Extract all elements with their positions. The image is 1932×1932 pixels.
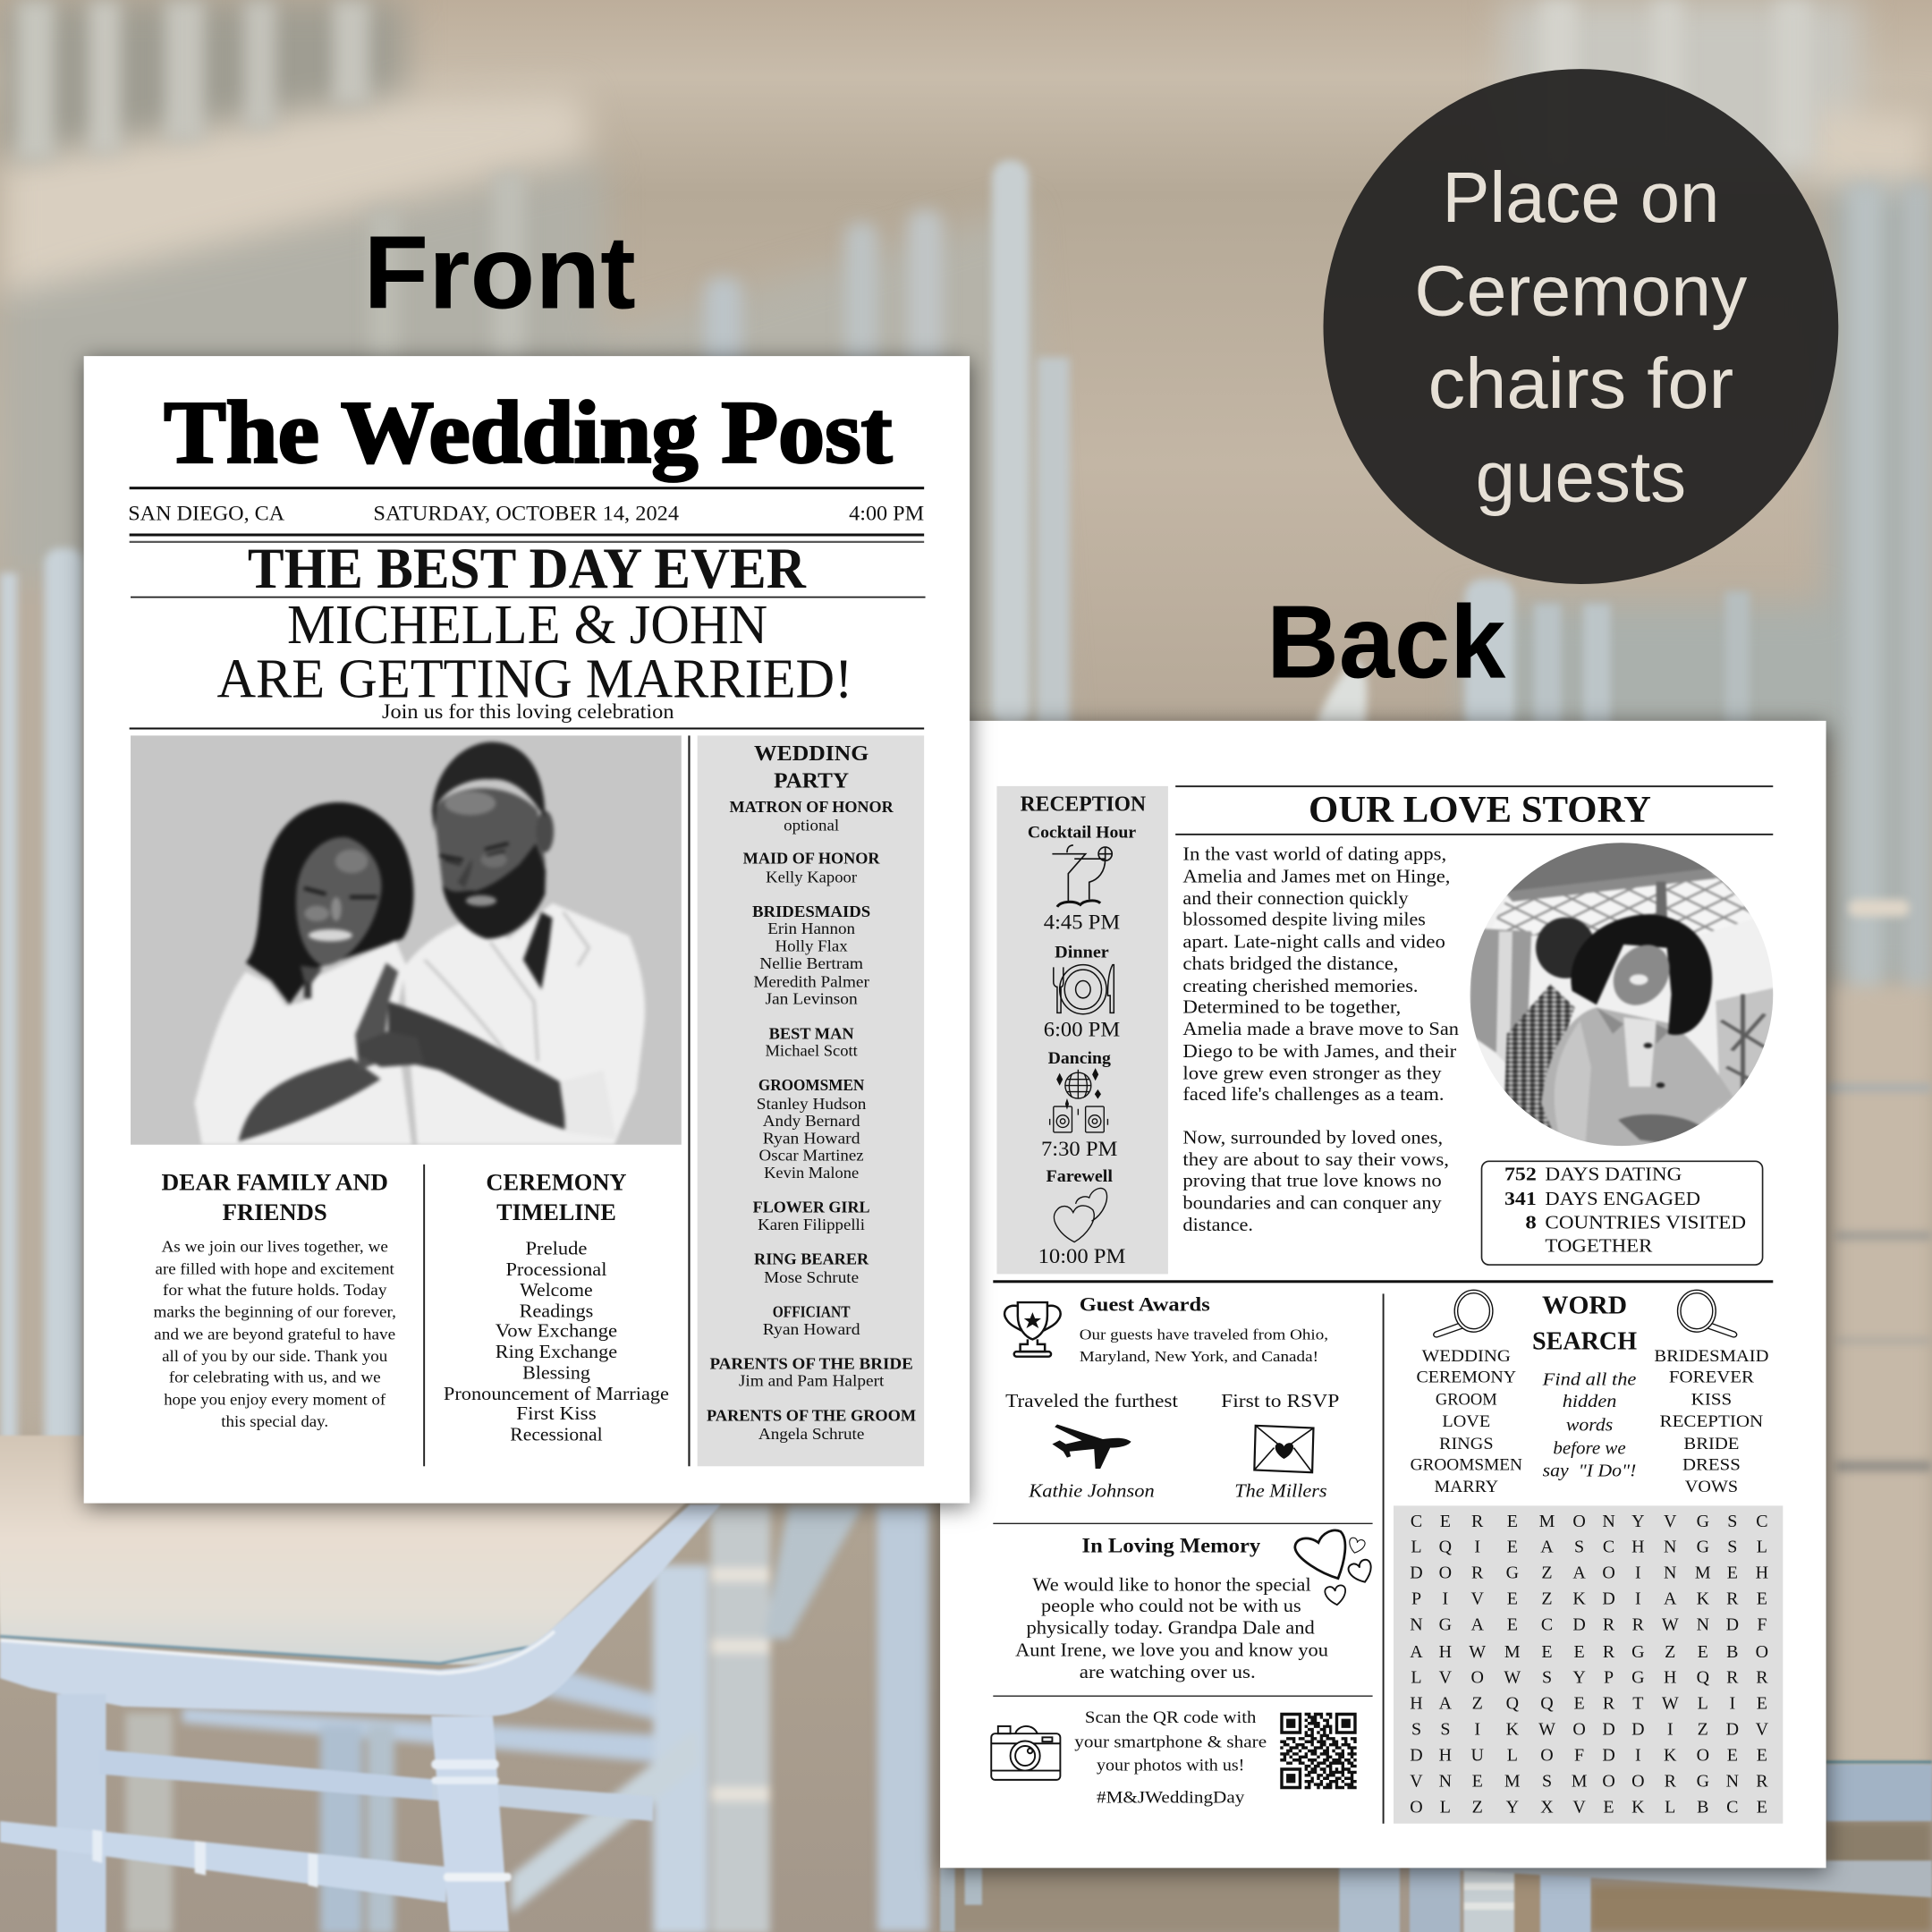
back side newspaper card bbox=[940, 721, 1826, 1868]
letter: dear family and friends: marks the beginning of our forever, bbox=[154, 1303, 396, 1321]
word search grid: VNEMSMOORGNR bbox=[1410, 1771, 1768, 1791]
icon: airplane bbox=[1052, 1424, 1131, 1469]
photo: couple in white shirts bbox=[123, 727, 690, 1152]
stats box: TOGETHER bbox=[1545, 1237, 1653, 1257]
stats box: DAYS ENGAGED bbox=[1545, 1190, 1700, 1209]
panel: reception schedule: 6:00 PM bbox=[1044, 1019, 1120, 1042]
text block: in loving memory: are watching over us. bbox=[1080, 1663, 1256, 1682]
word list left bbox=[1411, 1347, 1522, 1496]
panel: reception schedule: Dinner bbox=[1055, 943, 1109, 962]
qr code bbox=[1280, 1715, 1357, 1787]
callout badge: place on ceremony chairs bbox=[1323, 69, 1838, 584]
text block: love story body: they are about to say their vows, bbox=[1182, 1150, 1449, 1170]
panel: wedding party: Erin Hannon bbox=[767, 919, 855, 937]
word list right bbox=[1654, 1347, 1769, 1496]
panel: wedding party: WEDDING bbox=[754, 741, 869, 766]
callout badge: place on ceremony chairs: Place on bbox=[1442, 157, 1719, 237]
panel: wedding party: Karen Filippelli bbox=[758, 1216, 865, 1233]
panel: wedding party: BRIDESMAIDS bbox=[752, 902, 870, 920]
panel: reception schedule: 10:00 PM bbox=[1038, 1245, 1126, 1268]
text block: in loving memory: Aunt Irene, we love you and know you bbox=[1015, 1640, 1328, 1660]
list: ceremony timeline: CEREMONY bbox=[486, 1170, 627, 1196]
panel: wedding party: MAID OF HONOR bbox=[743, 850, 881, 868]
heading: our love story: OUR LOVE STORY bbox=[1309, 789, 1651, 831]
text block: in loving memory: We would like to honor the special bbox=[1032, 1575, 1311, 1595]
heading: word search bbox=[1532, 1291, 1637, 1355]
text block: love story body: faced life's challenges as a team. bbox=[1182, 1085, 1444, 1105]
word list left: MARRY bbox=[1434, 1478, 1498, 1496]
dateline row: 4:00 PM bbox=[849, 502, 924, 525]
subheading: join us: Join us for this loving celebration bbox=[382, 700, 674, 724]
text block: love story body: apart. Late-night calls and video bbox=[1182, 932, 1445, 952]
text block: love story body: Now, surrounded by loved ones, bbox=[1182, 1128, 1443, 1148]
icon: disco ball and speakers bbox=[1050, 1070, 1107, 1132]
list: ceremony timeline: TIMELINE bbox=[496, 1199, 616, 1225]
stats box: 341 bbox=[1504, 1190, 1537, 1209]
stats box: DAYS DATING bbox=[1545, 1165, 1682, 1185]
panel: reception schedule: Farewell bbox=[1046, 1167, 1114, 1186]
list: ceremony timeline: Ring Exchange bbox=[496, 1341, 617, 1362]
panel: wedding party: OFFICIANT bbox=[773, 1303, 851, 1321]
stats box bbox=[1482, 1161, 1763, 1265]
panel: wedding party: Mose Schrute bbox=[764, 1268, 859, 1286]
headline: couple announcement bbox=[216, 595, 852, 710]
panel: wedding party: Andy Bernard bbox=[763, 1112, 860, 1130]
word search grid: DORGZAOINMEH bbox=[1410, 1563, 1768, 1583]
word search instructions: Find all the bbox=[1542, 1369, 1637, 1389]
panel: reception schedule: Dancing bbox=[1048, 1049, 1111, 1068]
text block: in loving memory: people who could not be with us bbox=[1041, 1597, 1301, 1616]
word list right: RECEPTION bbox=[1660, 1412, 1763, 1431]
word list right: KISS bbox=[1691, 1390, 1732, 1409]
text block: qr instructions: your photos with us! bbox=[1097, 1757, 1244, 1775]
word search grid: NGAECDRRWNDF bbox=[1410, 1615, 1767, 1635]
panel: wedding party: Michael Scott bbox=[765, 1042, 858, 1060]
word list left: GROOM bbox=[1436, 1390, 1497, 1409]
panel: wedding party: Stanley Hudson bbox=[757, 1095, 866, 1113]
panel: wedding party: Meredith Palmer bbox=[753, 972, 869, 990]
word search grid bbox=[1394, 1505, 1783, 1824]
word search instructions bbox=[1542, 1369, 1637, 1480]
letter: dear family and friends: DEAR FAMILY AND bbox=[161, 1170, 388, 1196]
text block: in loving memory: physically today. Grandpa Dale and bbox=[1027, 1619, 1316, 1639]
icon: magnifying glass left bbox=[1434, 1290, 1493, 1337]
text block: love story body: Amelia and James met on Hinge, bbox=[1182, 867, 1450, 886]
letter: dear family and friends: for what the future holds. Today bbox=[163, 1281, 387, 1299]
icon: outline hearts bbox=[1295, 1530, 1376, 1606]
panel: reception schedule: RECEPTION bbox=[1021, 792, 1146, 816]
heading: word search: SEARCH bbox=[1532, 1326, 1637, 1355]
list: ceremony timeline bbox=[444, 1170, 669, 1445]
text block: in loving memory bbox=[1015, 1535, 1328, 1682]
icon: envelope with heart bbox=[1254, 1426, 1313, 1472]
icon: trophy bbox=[1004, 1302, 1061, 1357]
headline: couple announcement: MICHELLE & JOHN bbox=[287, 595, 767, 656]
letter: dear family and friends: for celebrating with us, and we bbox=[169, 1368, 381, 1386]
panel: wedding party: Oscar Martinez bbox=[759, 1147, 864, 1165]
panel: wedding party: PARENTS OF THE BRIDE bbox=[709, 1354, 913, 1372]
headline: the best day ever: THE BEST DAY EVER bbox=[248, 537, 807, 601]
list: ceremony timeline: Processional bbox=[505, 1258, 607, 1280]
word search instructions: before we bbox=[1553, 1439, 1626, 1459]
panel: wedding party: Jim and Pam Halpert bbox=[739, 1372, 884, 1390]
word search grid: PIVEZKDIAKRE bbox=[1411, 1589, 1767, 1609]
word search grid: OLZYXVEKLBCE bbox=[1410, 1797, 1767, 1817]
word list right: FOREVER bbox=[1669, 1368, 1754, 1387]
panel: wedding party: Kelly Kapoor bbox=[766, 868, 857, 886]
panel: wedding party: Angela Schrute bbox=[758, 1425, 864, 1443]
list: ceremony timeline: First Kiss bbox=[516, 1402, 597, 1424]
heading: back label: Back bbox=[1267, 584, 1506, 700]
award: traveled the furthest: Kathie Johnson bbox=[1028, 1482, 1155, 1502]
stats box: 8 bbox=[1525, 1213, 1537, 1233]
award: traveled the furthest: Traveled the furthest bbox=[1005, 1392, 1178, 1411]
letter: dear family and friends: are filled with hope and excitement bbox=[156, 1259, 394, 1277]
word search grid: AHWMEERGZEBO bbox=[1410, 1642, 1768, 1662]
panel: wedding party: FLOWER GIRL bbox=[753, 1199, 870, 1216]
word search instructions: say "I Do"! bbox=[1543, 1461, 1636, 1480]
word search grid: LQIEASCHNGSL bbox=[1411, 1538, 1767, 1557]
letter: dear family and friends: hope you enjoy every moment of bbox=[164, 1390, 386, 1408]
text block: qr instructions bbox=[1074, 1708, 1267, 1807]
text block: love story body: proving that true love knows no bbox=[1182, 1172, 1442, 1191]
panel: reception schedule bbox=[996, 786, 1168, 1274]
text block: love story body: Determined to be together, bbox=[1182, 997, 1401, 1017]
text block: qr instructions: your smartphone & share bbox=[1074, 1733, 1267, 1751]
text block: guest awards: Guest Awards bbox=[1080, 1293, 1210, 1316]
text block: guest awards: Our guests have traveled from Ohio, bbox=[1080, 1326, 1328, 1343]
icon: two hearts bbox=[1054, 1188, 1107, 1242]
letter: dear family and friends: As we join our lives together, we bbox=[161, 1238, 388, 1256]
text block: love story body: love grew even stronger as they bbox=[1182, 1064, 1442, 1084]
dateline row: SAN DIEGO, CA bbox=[128, 502, 284, 525]
word search instructions: hidden bbox=[1563, 1392, 1616, 1411]
text block: love story body: In the vast world of dating apps, bbox=[1182, 845, 1446, 865]
panel: wedding party: Ryan Howard bbox=[763, 1320, 860, 1338]
panel: wedding party: GROOMSMEN bbox=[758, 1076, 864, 1094]
list: ceremony timeline: Readings bbox=[520, 1301, 593, 1322]
letter: dear family and friends: and we are beyond grateful to have bbox=[154, 1325, 395, 1343]
word list right: BRIDESMAID bbox=[1654, 1347, 1769, 1366]
word list left: RINGS bbox=[1439, 1435, 1494, 1453]
award: first to rsvp bbox=[1221, 1392, 1339, 1502]
word list left: CEREMONY bbox=[1416, 1368, 1516, 1387]
text block: love story body: chats bridged the distance, bbox=[1182, 954, 1399, 974]
word list left: GROOMSMEN bbox=[1411, 1455, 1522, 1474]
masthead: the wedding post: The Wedding Post bbox=[164, 385, 892, 482]
panel: reception schedule: 7:30 PM bbox=[1041, 1138, 1118, 1161]
word search grid: LVOWSYPGHQRR bbox=[1411, 1668, 1768, 1688]
text block: love story body: blossomed despite living miles bbox=[1182, 911, 1426, 930]
word list right: BRIDE bbox=[1683, 1435, 1739, 1453]
stats box: 752 bbox=[1504, 1165, 1537, 1185]
award: traveled the furthest bbox=[1005, 1392, 1178, 1502]
panel: wedding party: PARENTS OF THE GROOM bbox=[707, 1406, 916, 1424]
panel: wedding party: MATRON OF HONOR bbox=[730, 798, 894, 816]
panel: wedding party bbox=[698, 735, 924, 1466]
text block: in loving memory: In Loving Memory bbox=[1081, 1535, 1261, 1558]
text block: love story body: Amelia made a brave move to San bbox=[1182, 1020, 1460, 1039]
icon: magnifying glass right bbox=[1678, 1290, 1737, 1337]
panel: reception schedule: 4:45 PM bbox=[1044, 911, 1120, 935]
text block: qr instructions: #M&JWeddingDay bbox=[1097, 1788, 1245, 1807]
word list left: LOVE bbox=[1442, 1412, 1490, 1431]
heading: word search: WORD bbox=[1542, 1291, 1627, 1319]
award: first to rsvp: The Millers bbox=[1234, 1482, 1327, 1502]
text block: qr instructions: Scan the QR code with bbox=[1085, 1708, 1257, 1727]
letter: dear family and friends bbox=[154, 1170, 396, 1430]
icon: camera bbox=[991, 1726, 1060, 1780]
front side newspaper card bbox=[84, 356, 970, 1504]
text block: guest awards bbox=[1080, 1293, 1328, 1365]
panel: wedding party: RING BEARER bbox=[754, 1250, 869, 1267]
panel: wedding party: BEST MAN bbox=[769, 1024, 854, 1042]
award: first to rsvp: First to RSVP bbox=[1221, 1392, 1339, 1411]
callout badge: place on ceremony chairs: guests bbox=[1476, 437, 1686, 517]
stats box: COUNTRIES VISITED bbox=[1545, 1213, 1746, 1233]
letter: dear family and friends: all of you by our side. Thank you bbox=[162, 1347, 387, 1365]
icon: cocktail glasses bbox=[1052, 845, 1112, 907]
text block: guest awards: Maryland, New York, and Canada! bbox=[1080, 1348, 1318, 1365]
dateline row: SATURDAY, OCTOBER 14, 2024 bbox=[373, 502, 679, 525]
list: ceremony timeline: Prelude bbox=[526, 1237, 587, 1258]
panel: wedding party: Jan Levinson bbox=[765, 990, 858, 1008]
text block: love story body: and their connection quickly bbox=[1182, 889, 1409, 909]
list: ceremony timeline: Vow Exchange bbox=[496, 1320, 617, 1342]
word list right: DRESS bbox=[1682, 1455, 1741, 1474]
heading: front label: Front bbox=[363, 214, 636, 330]
text block: love story body: creating cherished memories. bbox=[1182, 977, 1419, 996]
text block: love story body bbox=[1182, 845, 1460, 1235]
list: ceremony timeline: Pronouncement of Marriage bbox=[444, 1383, 669, 1404]
dateline row bbox=[128, 502, 924, 525]
panel: wedding party: optional bbox=[784, 816, 839, 834]
headline: couple announcement: ARE GETTING MARRIED! bbox=[216, 649, 852, 710]
word search grid: SSIKWODDIZDV bbox=[1411, 1720, 1769, 1740]
word list right: VOWS bbox=[1685, 1478, 1738, 1496]
word search instructions: words bbox=[1566, 1415, 1613, 1435]
icon: plate with fork and knife bbox=[1054, 965, 1114, 1014]
callout badge: place on ceremony chairs: chairs for bbox=[1428, 343, 1733, 423]
panel: reception schedule: Cocktail Hour bbox=[1028, 824, 1137, 843]
panel: wedding party: PARTY bbox=[774, 768, 849, 792]
text block: love story body: boundaries and can conquer any bbox=[1182, 1193, 1442, 1213]
panel: wedding party: Ryan Howard bbox=[763, 1129, 860, 1147]
letter: dear family and friends: FRIENDS bbox=[223, 1199, 327, 1225]
word search grid: DHULOFDIKOEE bbox=[1410, 1746, 1767, 1766]
panel: wedding party: Kevin Malone bbox=[764, 1164, 859, 1182]
round photo: couple at gazebo bbox=[1470, 843, 1773, 1147]
panel: wedding party: Nellie Bertram bbox=[759, 954, 863, 972]
word list left: WEDDING bbox=[1422, 1347, 1511, 1366]
word search grid: HAZQQERTWLIE bbox=[1410, 1694, 1767, 1714]
text block: love story body: distance. bbox=[1182, 1216, 1253, 1235]
list: ceremony timeline: Recessional bbox=[510, 1423, 603, 1445]
list: ceremony timeline: Blessing bbox=[522, 1361, 590, 1383]
word search grid: CEREMONYVGSC bbox=[1411, 1512, 1768, 1531]
text block: love story body: Diego to be with James, and their bbox=[1182, 1042, 1456, 1062]
letter: dear family and friends: this special day. bbox=[221, 1412, 328, 1430]
list: ceremony timeline: Welcome bbox=[520, 1279, 593, 1301]
panel: wedding party: Holly Flax bbox=[775, 936, 848, 954]
callout badge: place on ceremony chairs: Ceremony bbox=[1414, 251, 1747, 331]
